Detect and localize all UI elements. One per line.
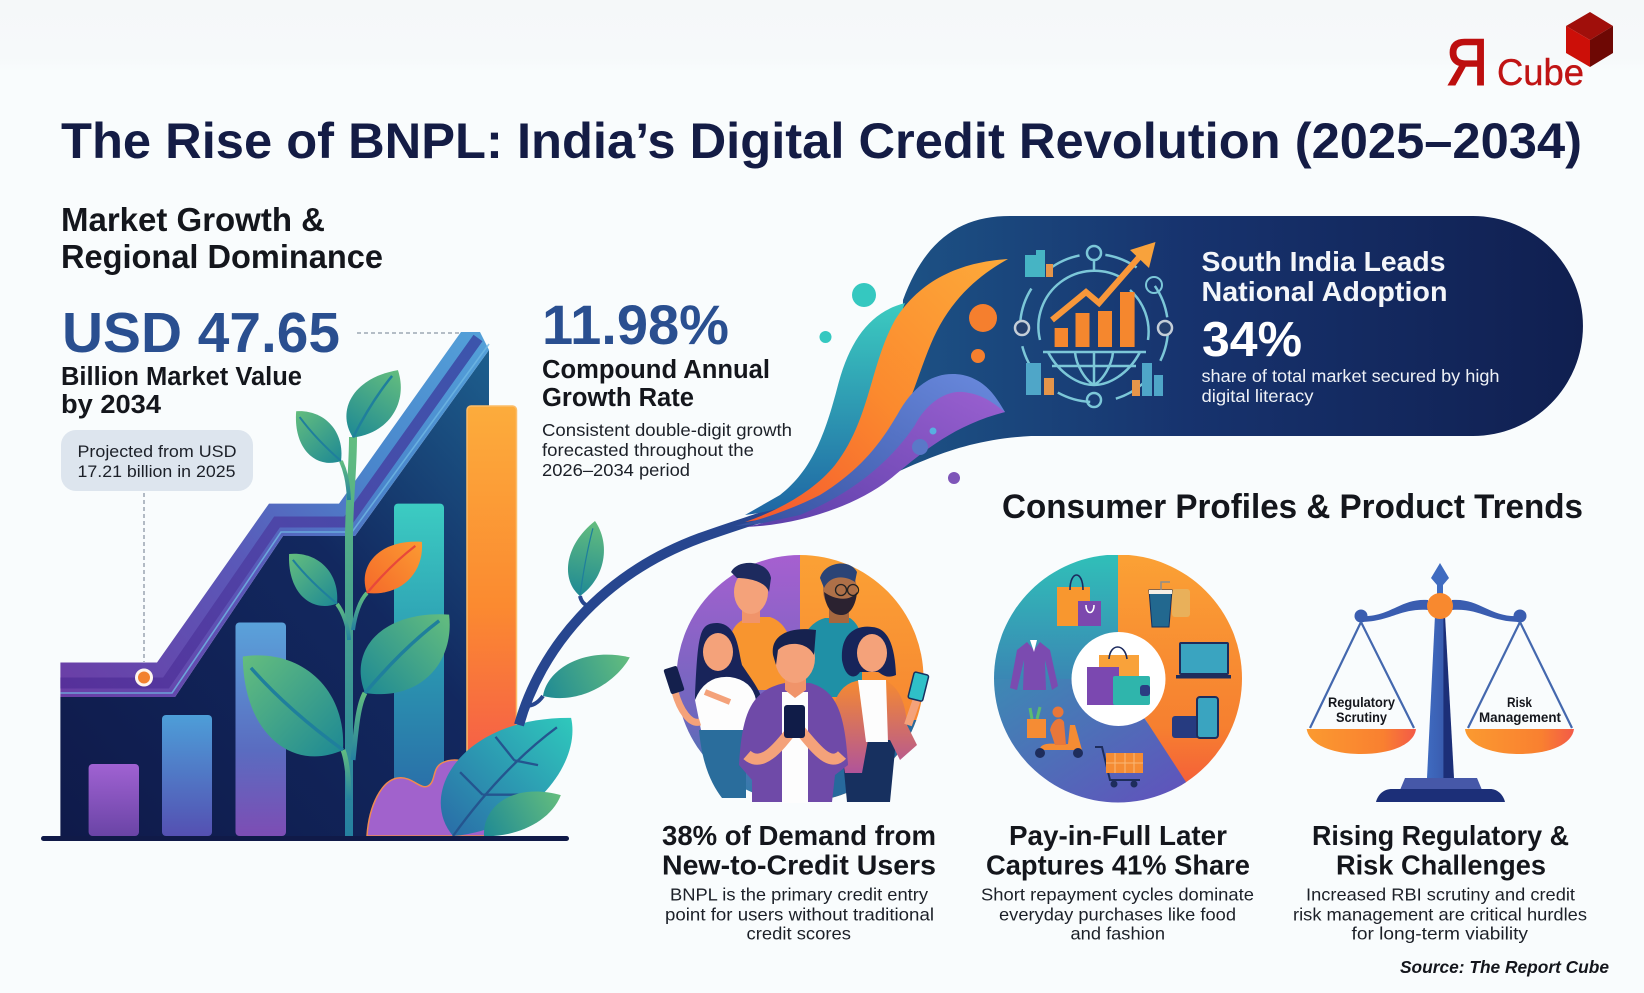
column: new-to-credit: point for users without traditional (665, 904, 934, 924)
plant stem (337, 437, 367, 836)
column: regulatory: Risk Challenges (1336, 850, 1546, 880)
stat: CAGR: 2026–2034 period (542, 460, 690, 480)
column: regulatory (1293, 820, 1587, 944)
heading: market growth: Regional Dominance (61, 238, 383, 275)
source note: Source: The Report Cube (1400, 957, 1609, 977)
scale labels: Regulatory (1328, 695, 1395, 710)
scale labels: Management (1479, 710, 1561, 725)
person: center man (739, 629, 848, 803)
big foreground leaves (417, 682, 595, 860)
icon: shopping bags (1057, 575, 1101, 626)
column: pay-in-full: Captures 41% Share (986, 850, 1250, 880)
column: regulatory: for long-term viability (1352, 924, 1528, 944)
stat: CAGR: Consistent double-digit growth (542, 420, 792, 440)
illustration: balance scales (1307, 563, 1574, 802)
stat: USD 47.65 billion: USD 47.65 (62, 301, 340, 365)
stat: CAGR: 11.98% (542, 293, 729, 356)
column: regulatory: Increased RBI scrutiny and credit (1306, 884, 1575, 904)
column: regulatory: risk management are critical hurdles (1293, 904, 1587, 924)
callout: projected from: 17.21 billion in 2025 (78, 462, 236, 481)
icon: laptop (1176, 643, 1231, 678)
illustration: people circle (663, 555, 929, 803)
column: new-to-credit: 38% of Demand from (662, 820, 936, 851)
person: right woman (834, 627, 929, 802)
icon: coat (1010, 640, 1058, 690)
icon: center bags and wallet (1087, 647, 1150, 705)
person: back right (802, 563, 862, 697)
stat: USD 47.65 billion: by 2034 (61, 391, 162, 419)
scale labels (1328, 695, 1561, 725)
icon: delivery scooter (1027, 706, 1083, 758)
heading: consumer profiles: Consumer Profiles & Product Trends (1002, 488, 1583, 526)
banner text: digital literacy (1202, 386, 1314, 406)
column: pay-in-full: and fashion (1070, 924, 1165, 944)
icon: phone and card (1172, 697, 1218, 738)
icon: globe with chart (1015, 242, 1172, 407)
banner: south india (860, 216, 1583, 492)
column: new-to-credit: BNPL is the primary credit entry (670, 884, 928, 904)
banner text: share of total market secured by high (1202, 366, 1500, 386)
column: new-to-credit (662, 820, 936, 944)
person: left woman (663, 623, 762, 798)
banner text: National Adoption (1202, 276, 1448, 307)
stat: CAGR: Growth Rate (542, 384, 694, 412)
scale labels: Scrutiny (1336, 710, 1387, 725)
callout: projected from (61, 430, 253, 491)
logo: RCube: Cube (1497, 52, 1584, 93)
swoosh and vine (519, 259, 1008, 725)
column: pay-in-full (981, 820, 1254, 944)
heading: market growth: Market Growth & (61, 201, 325, 238)
callout: projected from: Projected from USD (78, 442, 236, 461)
logo: RCube: Я (1446, 25, 1488, 99)
scale labels: Risk (1507, 695, 1532, 710)
column: pay-in-full: Short repayment cycles dominate (981, 884, 1254, 904)
column: regulatory: Rising Regulatory & (1312, 820, 1569, 851)
banner text (1202, 246, 1500, 406)
icon: cart (1095, 747, 1143, 788)
stat: CAGR (542, 293, 792, 480)
column: new-to-credit: New-to-Credit Users (662, 850, 936, 880)
chart: growth bars with plant (41, 332, 595, 860)
icon: drink and burger (1149, 582, 1190, 627)
stat: CAGR: Compound Annual (542, 356, 770, 384)
illustration: purchase pie (994, 555, 1242, 803)
column: pay-in-full: everyday purchases like food (999, 904, 1236, 924)
logo: RCube (1446, 12, 1613, 99)
stat: USD 47.65 billion: Billion Market Value (61, 363, 302, 391)
plant leaves (215, 357, 470, 779)
column: pay-in-full: Pay-in-Full Later (1009, 820, 1227, 851)
stat: CAGR: forecasted throughout the (542, 440, 754, 460)
title: The Rise of BNPL: India’s Digital Credit Revolution (2025–2034) (61, 113, 1582, 169)
banner text: 34% (1202, 313, 1302, 367)
heading: market growth (61, 201, 383, 275)
purple bush (367, 760, 490, 836)
person: back left (731, 563, 790, 690)
stat: USD 47.65 billion (61, 301, 340, 419)
banner text: South India Leads (1202, 246, 1446, 277)
column: new-to-credit: credit scores (746, 924, 851, 944)
